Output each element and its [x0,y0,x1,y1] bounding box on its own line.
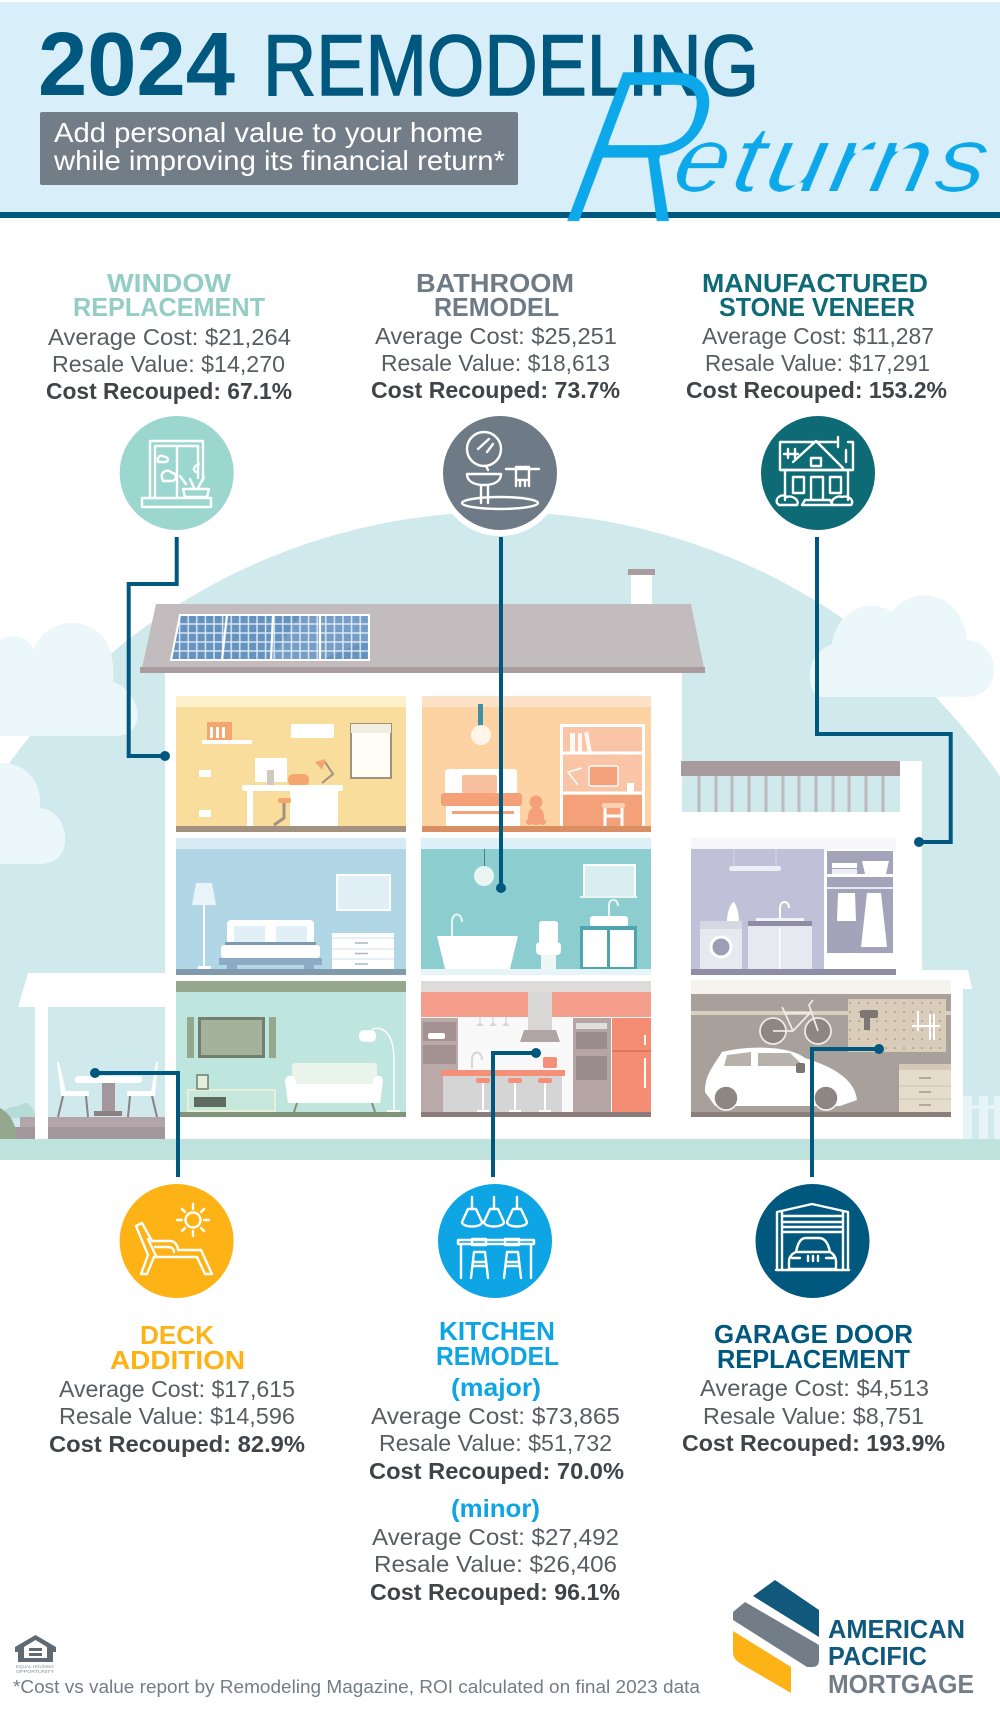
minor stats: Resale Value: $26,406 [374,1551,617,1577]
icon: garage [756,1184,870,1298]
major stats [369,1374,624,1484]
panel: deck addition [49,1320,305,1457]
stats: Resale Value: $17,291 [705,350,930,376]
roof [140,604,705,673]
subtitle box [40,112,518,185]
house body [165,670,972,1139]
subtitle box: Add personal value to your home [54,117,483,148]
roof with solar panels and chimney [140,569,705,673]
heading: DECK [140,1320,214,1350]
heading [714,1319,913,1374]
room: orange bedroom [422,696,651,832]
stats: Cost Recouped: 82.9% [49,1431,305,1457]
icon: bathroom sink [437,410,563,536]
connector lines [90,537,951,1177]
stats: Resale Value: $14,596 [59,1403,295,1429]
heading: REMODEL [434,292,559,322]
major stats: Average Cost: $73,865 [371,1403,620,1429]
stats [371,323,620,403]
scene: hill background [0,514,1000,1139]
heading [416,268,574,322]
room: office [176,696,406,832]
stats: Average Cost: $11,287 [702,323,934,349]
stats: Resale Value: $18,613 [381,350,610,376]
stats: Cost Recouped: 73.7% [371,377,620,403]
panel: garage door replacement [682,1319,945,1456]
major stats: Resale Value: $51,732 [379,1430,612,1456]
line: bathroom [496,537,506,893]
heading: GARAGE DOOR [714,1319,913,1349]
major stats: Cost Recouped: 70.0% [369,1458,624,1484]
title: 2024 [38,15,235,115]
heading: MANUFACTURED [702,268,928,298]
line: window [129,537,177,761]
panel: window replacement [46,268,292,404]
stats [49,1376,305,1457]
ground strip [0,1139,1000,1160]
line: garage [812,1044,884,1177]
panel: kitchen remodel [369,1316,624,1605]
fence [963,1096,1000,1139]
heading: REPLACEMENT [73,292,265,322]
subtitle box: while improving its financial return* [53,145,505,176]
title script word: Returns: eturns [663,105,1000,215]
room: garage [691,980,951,1117]
icon: window [120,416,234,530]
logo mark [733,1580,819,1693]
heading: ADDITION [110,1345,245,1375]
heading: REPLACEMENT [717,1344,910,1374]
icon: equal housing opportunity: OPPORTUNITY [16,1669,54,1674]
room: blue bedroom [176,838,406,975]
logo wordmark: MORTGAGE [828,1669,974,1699]
logo wordmark [828,1614,974,1699]
title: REMODELING [263,18,759,114]
panel: bathroom remodel [371,268,620,403]
room: living room [176,981,406,1117]
title [38,15,759,115]
heading [436,1316,559,1371]
icon: stone house [761,416,875,530]
footnote: *Cost vs value report by Remodeling Magazine, ROI calculated on final 2023 data [13,1677,701,1697]
stats [46,324,292,404]
icon: kitchen bar and pendant lights [438,1184,552,1298]
logo wordmark: AMERICAN [828,1614,965,1644]
heading: KITCHEN [439,1316,555,1346]
line: stone veneer [817,537,951,847]
minor stats [370,1495,620,1605]
stats: Cost Recouped: 193.9% [682,1430,945,1456]
stats [686,323,947,403]
line: kitchen [493,1048,541,1177]
minor stats: Average Cost: $27,492 [372,1524,619,1550]
icon: equal housing opportunity: EQUAL HOUSING [16,1664,55,1669]
minor stats: (minor) [451,1495,540,1523]
heading: REMODEL [436,1341,559,1371]
stats: Resale Value: $8,751 [703,1403,924,1429]
header banner [0,2,1000,218]
roof terrace railing [681,761,900,812]
minor stats: Cost Recouped: 96.1% [370,1579,620,1605]
room: kitchen [421,981,651,1117]
patio: covered deck with table and chairs [0,973,165,1139]
stats: Average Cost: $21,264 [48,324,291,350]
chimney [628,569,655,605]
stats: Cost Recouped: 153.2% [686,377,947,403]
line: deck [90,1068,178,1177]
major stats: (major) [451,1374,541,1402]
logo wordmark: PACIFIC [828,1641,927,1671]
solar panels [171,615,369,660]
icon: deck chair and sun [120,1184,234,1298]
stats: Average Cost: $25,251 [375,323,617,349]
heading [702,268,928,322]
room: bathroom [421,838,651,975]
heading: WINDOW [107,268,231,298]
icon: equal housing opportunity [15,1635,56,1674]
scene: clouds [0,595,994,864]
room: laundry and closet [691,838,896,975]
stats: Average Cost: $4,513 [700,1375,929,1401]
heading: STONE VENEER [719,292,915,322]
heading [110,1320,245,1375]
stats [682,1375,945,1456]
heading [73,268,265,322]
title script word: Returns: R [548,22,736,270]
heading: BATHROOM [416,268,574,298]
stats: Resale Value: $14,270 [52,351,285,377]
panel: manufactured stone veneer [686,268,947,403]
logo: American Pacific Mortgage [733,1580,974,1699]
stats: Cost Recouped: 67.1% [46,378,292,404]
stats: Average Cost: $17,615 [59,1376,295,1402]
